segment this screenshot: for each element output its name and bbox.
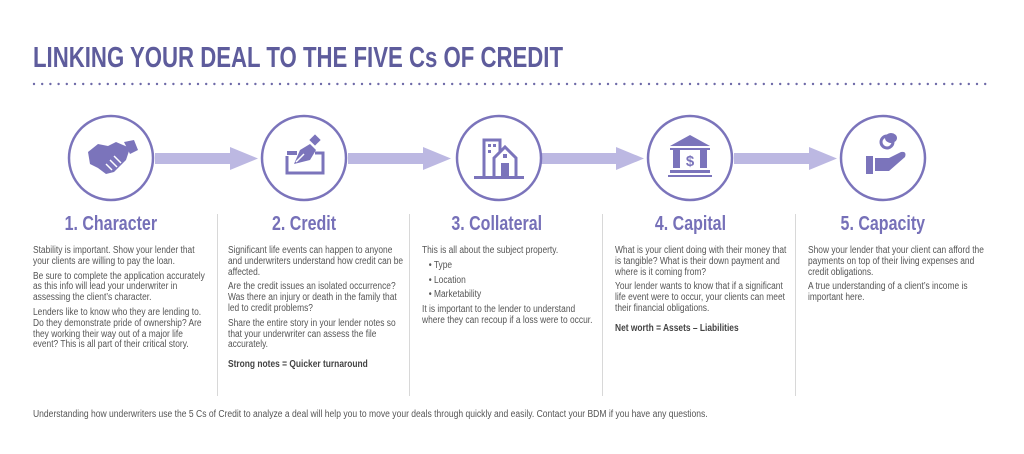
text: collateral: This is all about the subject property.	[422, 245, 558, 256]
icon: buildings	[457, 116, 541, 200]
heading: collateral: 3. Collateral	[452, 213, 542, 235]
footer note: Understanding how underwriters use the 5 Cs of Credit to analyze a deal will help you to move your deals through quickly and easily. Contact your BDM if you have any questions.	[33, 409, 708, 420]
text: character: Be sure to complete the application accurately as this info will lead your underwriter in assessing the client’s character.	[33, 271, 205, 303]
text: collateral: • Location	[429, 275, 466, 286]
icon: handshake	[69, 116, 153, 200]
heading: credit: 2. Credit	[272, 213, 336, 235]
arrow 2	[348, 147, 451, 170]
heading: capital: 4. Capital	[654, 213, 726, 235]
text: character: Lenders like to know who they are lending to. Do they demonstrate pride of ownership? Are they working their way out of a major life event? This is all part of their critical story.	[33, 307, 202, 350]
text: collateral	[422, 245, 592, 326]
text: capital: Your lender wants to know that if a significant life event were to occur, your clients can meet their financial obligations.	[615, 281, 785, 314]
text: capital	[615, 245, 786, 334]
text: credit: Strong notes = Quicker turnaround	[228, 359, 368, 370]
text: capacity: A true understanding of a client’s income is important here.	[808, 281, 968, 303]
arrow 1	[155, 147, 258, 170]
text: credit	[228, 245, 403, 370]
arrow 4	[734, 147, 837, 170]
icon: bank	[648, 116, 732, 200]
text: character	[33, 245, 205, 350]
text: collateral: • Marketability	[429, 289, 481, 300]
text: collateral: It is important to the lender to understand where they can recoup if a loss were to occur.	[422, 304, 592, 326]
arrow 3	[541, 147, 644, 170]
text: credit: Share the entire story in your lender notes so that your underwriter can assess the file accurately.	[228, 318, 396, 350]
text: collateral: • Type	[429, 260, 452, 271]
text: capital: What is your client doing with their money that is tangible? What is their down payment and where is it coming from?	[615, 245, 786, 278]
icon: hand with coin	[841, 116, 925, 200]
text: credit: Significant life events can happen to anyone and underwriters understand how credit can be affected.	[228, 245, 403, 278]
text: capacity	[808, 245, 984, 303]
title: LINKING YOUR DEAL TO THE FIVE Cs OF CREDIT	[33, 42, 563, 74]
text: capital: Net worth = Assets – Liabilities	[615, 323, 739, 334]
text: capacity: Show your lender that your client can afford the payments on top of their living expenses and credit obligations.	[808, 245, 984, 278]
icon: pen and document	[262, 116, 346, 200]
heading: capacity: 5. Capacity	[841, 213, 925, 235]
heading: character: 1. Character	[65, 213, 157, 235]
text: character: Stability is important. Show your lender that your clients are willing to pay the loan.	[33, 245, 195, 267]
text: credit: Are the credit issues an isolated occurrence? Was there an injury or death in the family that led to credit problems?	[228, 281, 397, 314]
icon: bank: $	[686, 153, 695, 170]
